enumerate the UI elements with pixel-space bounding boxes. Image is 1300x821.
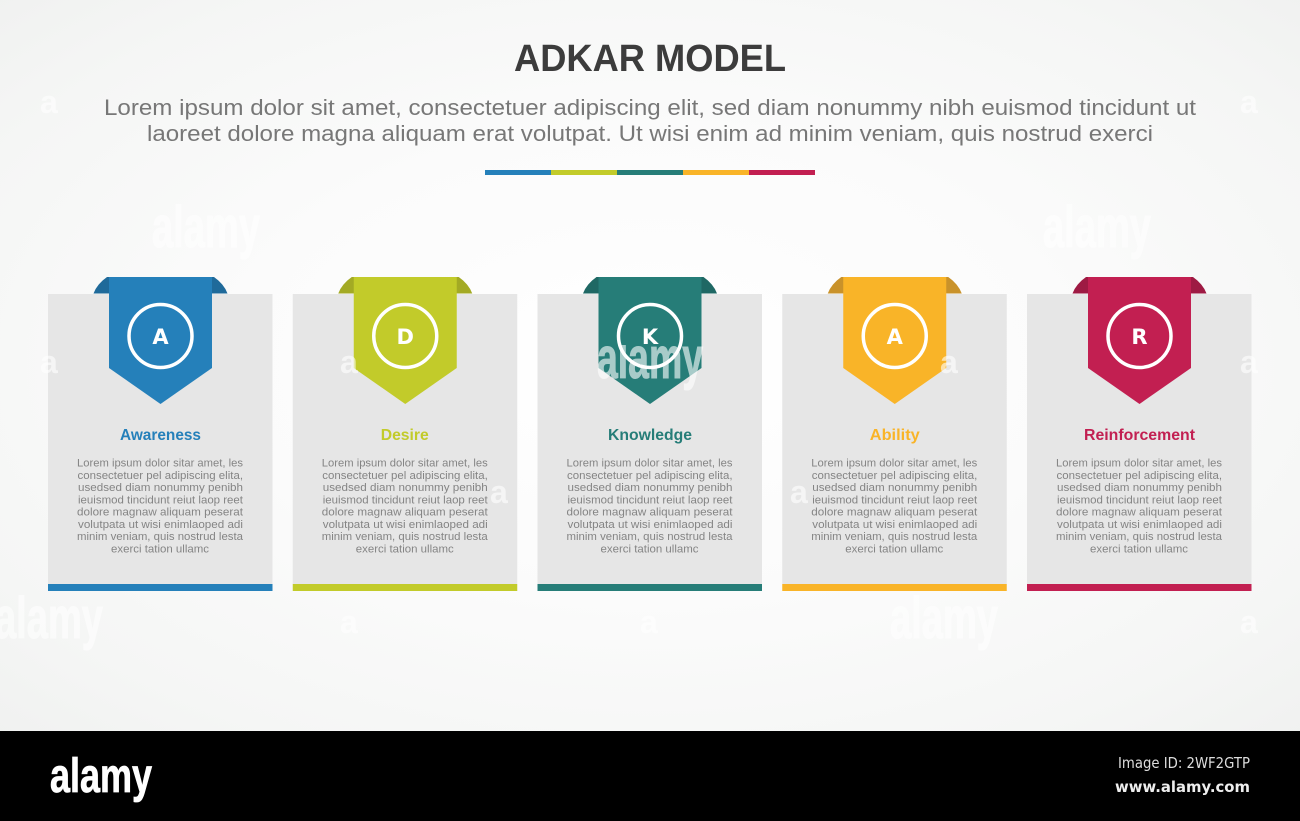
body text: reinforcement: minim veniam, quis nostrud lesta bbox=[1056, 531, 1223, 543]
body text: reinforcement bbox=[1056, 458, 1223, 556]
body text: awareness: minim veniam, quis nostrud lesta bbox=[77, 531, 244, 543]
title: ADKAR MODEL bbox=[514, 38, 786, 80]
body text: ability: Lorem ipsum dolor sitar amet, les bbox=[811, 458, 978, 470]
watermarks bbox=[48, 345, 1252, 503]
body text: knowledge: dolore magnaw aliquam peserat bbox=[566, 507, 732, 519]
body text: ability: volutpata ut wisi enimlaoped adi bbox=[812, 519, 977, 531]
body text: awareness: exerci tation ullamc bbox=[111, 544, 210, 556]
ribbon: A: A bbox=[152, 325, 169, 349]
heading: reinforcement: Reinforcement bbox=[1084, 427, 1195, 444]
body text: desire: ieuismod tincidunt reiut laop reet bbox=[323, 494, 488, 506]
panel: ability bbox=[782, 277, 1007, 591]
panel: desire bbox=[293, 277, 517, 591]
body text: awareness bbox=[77, 458, 244, 556]
watermarks: a bbox=[40, 84, 58, 120]
body text: knowledge: volutpata ut wisi enimlaoped adi bbox=[568, 519, 732, 531]
watermarks: alamy bbox=[890, 586, 998, 651]
body text: ability: usedsed diam nonummy penibh bbox=[812, 482, 977, 494]
body text: knowledge: Lorem ipsum dolor sitar amet, les bbox=[566, 458, 733, 470]
body text: reinforcement: exerci tation ullamc bbox=[1090, 544, 1189, 556]
heading: ability: Ability bbox=[870, 427, 920, 444]
body text: awareness: usedsed diam nonummy penibh bbox=[78, 482, 243, 494]
ribbon: A bbox=[94, 277, 228, 404]
footer bar bbox=[0, 731, 1300, 821]
body text: desire bbox=[322, 458, 489, 556]
footer url: www.alamy.com bbox=[1115, 778, 1250, 796]
ribbon: A: A bbox=[887, 325, 904, 349]
ribbon: R bbox=[1072, 277, 1206, 404]
ribbon: K bbox=[583, 277, 717, 404]
body text: awareness: dolore magnaw aliquam peserat bbox=[77, 507, 243, 519]
footer image id: Image ID: 2WF2GTP bbox=[1118, 754, 1250, 772]
body text: reinforcement: Lorem ipsum dolor sitar amet, les bbox=[1056, 458, 1223, 470]
watermarks: alamy bbox=[597, 326, 703, 391]
body text: knowledge: consectetuer pel adipiscing elita, bbox=[567, 470, 732, 482]
body text: desire: dolore magnaw aliquam peserat bbox=[322, 507, 488, 519]
watermarks: a bbox=[1240, 84, 1258, 120]
ribbon: D: D bbox=[397, 325, 414, 349]
body text: desire: exerci tation ullamc bbox=[356, 544, 454, 556]
ribbon: A bbox=[828, 277, 962, 404]
body text: reinforcement: ieuismod tincidunt reiut laop reet bbox=[1057, 494, 1222, 506]
ribbon: D bbox=[338, 277, 472, 404]
body text: knowledge: minim veniam, quis nostrud lesta bbox=[566, 531, 733, 543]
heading: desire: Desire bbox=[381, 427, 429, 444]
body text: ability: minim veniam, quis nostrud lesta bbox=[811, 531, 978, 543]
subtitle text bbox=[104, 95, 1196, 146]
body text: reinforcement: usedsed diam nonummy penibh bbox=[1057, 482, 1222, 494]
watermarks: a bbox=[940, 344, 958, 380]
watermarks: alamy bbox=[1043, 195, 1151, 260]
watermarks: a bbox=[40, 344, 58, 380]
watermarks: a bbox=[490, 474, 508, 510]
ribbon: R: R bbox=[1131, 325, 1148, 349]
body text: reinforcement: dolore magnaw aliquam peserat bbox=[1056, 507, 1222, 519]
subtitle text: Lorem ipsum dolor sit amet, consectetuer adipiscing elit, sed diam nonummy nibh euismod tincidunt ut bbox=[104, 95, 1196, 120]
body text: awareness: Lorem ipsum dolor sitar amet, les bbox=[77, 458, 244, 470]
body text: awareness: ieuismod tincidunt reiut laop reet bbox=[78, 494, 243, 506]
body text: desire: consectetuer pel adipiscing elita, bbox=[322, 470, 488, 482]
heading: knowledge: Knowledge bbox=[608, 427, 692, 444]
body text: desire: Lorem ipsum dolor sitar amet, les bbox=[322, 458, 488, 470]
body text: ability: exerci tation ullamc bbox=[845, 544, 944, 556]
body text: knowledge: usedsed diam nonummy penibh bbox=[568, 482, 732, 494]
body text: ability: consectetuer pel adipiscing elita, bbox=[812, 470, 977, 482]
body text: knowledge: ieuismod tincidunt reiut laop reet bbox=[568, 494, 732, 506]
panel: reinforcement bbox=[1027, 277, 1252, 591]
body text: ability bbox=[811, 458, 978, 556]
body text: awareness: consectetuer pel adipiscing elita, bbox=[78, 470, 243, 482]
heading: awareness: Awareness bbox=[120, 427, 201, 444]
panel: awareness bbox=[48, 277, 272, 591]
footer logo: alamy bbox=[50, 750, 152, 803]
watermarks: a bbox=[340, 344, 358, 380]
panel: knowledge bbox=[538, 277, 762, 591]
subtitle text: laoreet dolore magna aliquam erat volutpat. Ut wisi enim ad minim veniam, quis nostrud exerci bbox=[147, 121, 1153, 146]
watermarks: a bbox=[1240, 344, 1258, 380]
body text: reinforcement: volutpata ut wisi enimlaoped adi bbox=[1057, 519, 1222, 531]
body text: knowledge: exerci tation ullamc bbox=[600, 544, 699, 556]
body text: awareness: volutpata ut wisi enimlaoped adi bbox=[78, 519, 243, 531]
watermarks: a bbox=[790, 474, 808, 510]
ribbon: K: K bbox=[642, 325, 659, 349]
watermarks: a bbox=[640, 604, 658, 640]
body text: ability: dolore magnaw aliquam peserat bbox=[811, 507, 977, 519]
watermarks: a bbox=[1240, 604, 1258, 640]
body text: reinforcement: consectetuer pel adipiscing elita, bbox=[1056, 470, 1222, 482]
body text: desire: volutpata ut wisi enimlaoped adi bbox=[323, 519, 488, 531]
colour divider bbox=[485, 170, 815, 175]
watermarks: a bbox=[340, 604, 358, 640]
body text: knowledge bbox=[566, 458, 733, 556]
body text: desire: minim veniam, quis nostrud lesta bbox=[322, 531, 489, 543]
body text: ability: ieuismod tincidunt reiut laop reet bbox=[812, 494, 977, 506]
watermarks: alamy bbox=[152, 195, 260, 260]
body text: desire: usedsed diam nonummy penibh bbox=[323, 482, 488, 494]
